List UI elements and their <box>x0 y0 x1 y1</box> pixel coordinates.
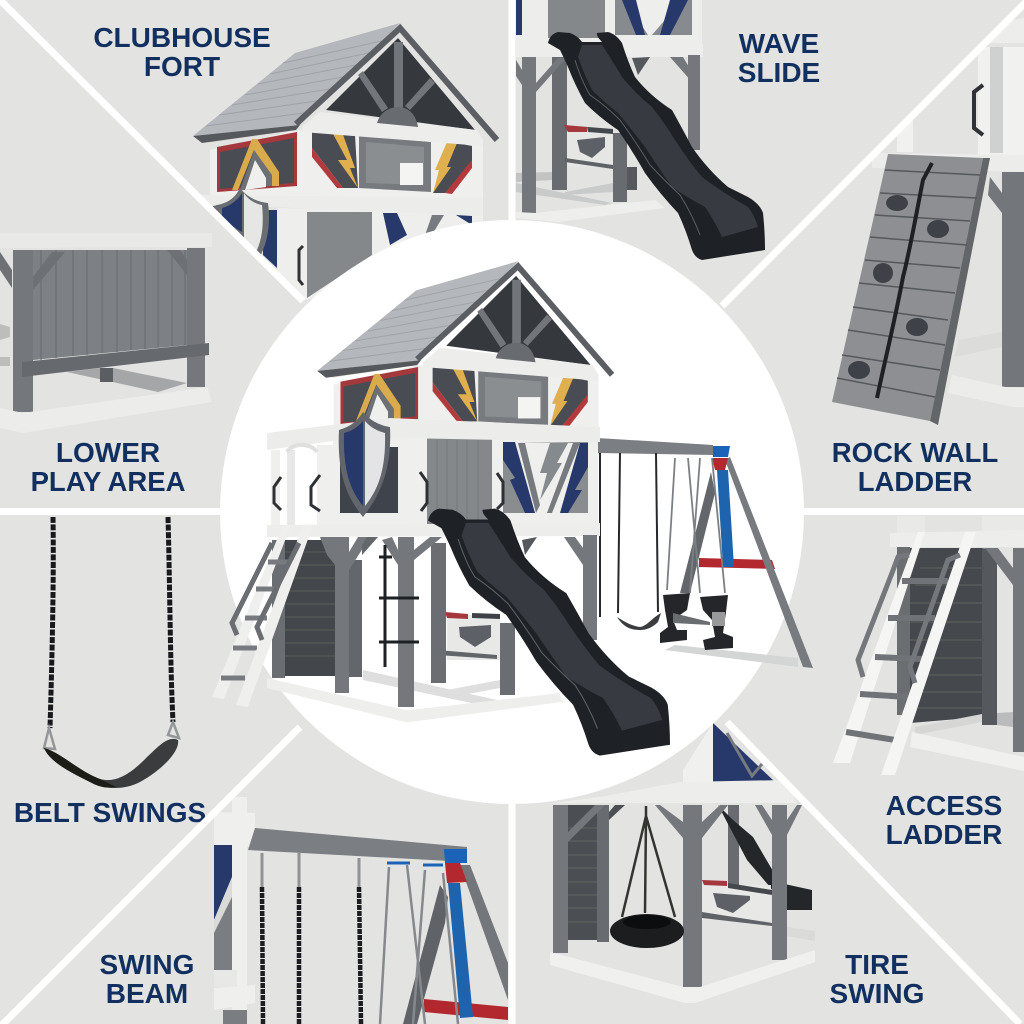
panel: lower play area <box>0 233 212 497</box>
main swing set illustration <box>212 261 813 756</box>
heading: tire swing: TIRE <box>845 949 909 980</box>
swing beam photo <box>214 797 508 1024</box>
panel: swing beam <box>100 797 508 1024</box>
upper fort and roof <box>317 261 612 431</box>
heading: belt swings: BELT SWINGS <box>14 797 206 828</box>
A-frame <box>403 849 508 1024</box>
heading: access ladder: LADDER <box>886 819 1002 850</box>
heading: clubhouse fort: FORT <box>144 51 220 82</box>
wave slide photo <box>515 0 765 260</box>
heading: access ladder: ACCESS <box>886 790 1002 821</box>
rock wall photo <box>832 18 1024 425</box>
panel: tire swing <box>550 723 924 1009</box>
rope ladder <box>379 545 419 667</box>
panel: access ladder <box>833 516 1024 850</box>
clubhouse fort photo <box>193 23 497 300</box>
heading: swing beam: BEAM <box>106 978 188 1009</box>
belt swing photo <box>44 517 179 788</box>
panel: wave slide <box>515 0 820 260</box>
heading: swing beam: SWING <box>100 949 194 980</box>
panel: belt swings <box>14 517 206 828</box>
main wave slide <box>428 509 670 756</box>
access ladder photo <box>833 516 1024 775</box>
heading: lower play area: LOWER <box>56 437 160 468</box>
panel: rock wall ladder <box>832 18 1024 497</box>
tire swing <box>610 806 684 948</box>
heading: lower play area: PLAY AREA <box>31 466 186 497</box>
lower structure <box>267 535 597 722</box>
heading: rock wall ladder: ROCK WALL <box>832 437 998 468</box>
heading: wave slide: SLIDE <box>738 57 820 88</box>
center circle <box>220 220 804 804</box>
shield <box>339 412 390 517</box>
tire swing photo <box>550 723 815 1003</box>
panel: clubhouse fort <box>93 22 497 300</box>
swing frame and swings <box>597 438 813 668</box>
beam <box>248 828 467 862</box>
heading: wave slide: WAVE <box>739 28 819 59</box>
chains and ropes <box>262 853 458 1024</box>
heading: rock wall ladder: LADDER <box>858 466 972 497</box>
heading: tire swing: SWING <box>830 978 924 1009</box>
lower play area photo <box>0 233 212 433</box>
heading: clubhouse fort: CLUBHOUSE <box>93 22 271 53</box>
play deck <box>267 418 600 537</box>
main access ladder <box>212 525 313 707</box>
climbing wall <box>832 154 990 425</box>
